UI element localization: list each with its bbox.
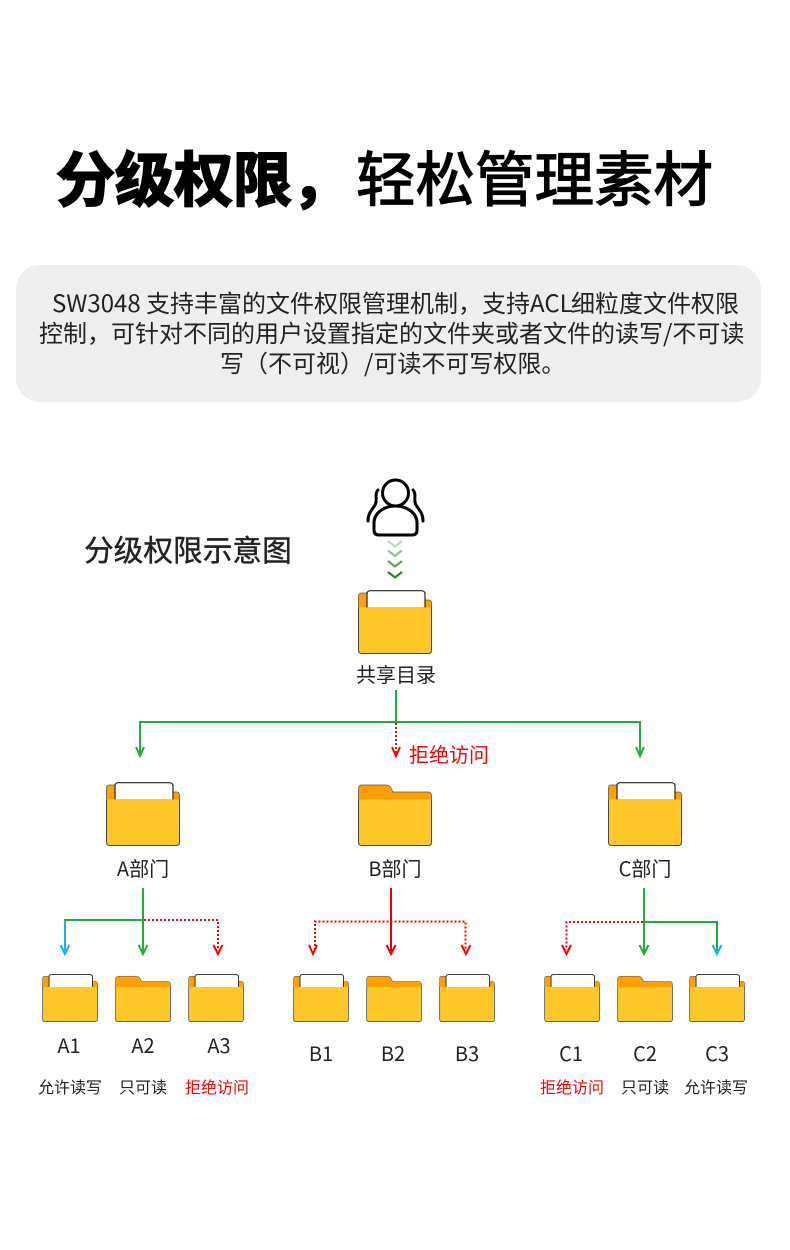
arrows: department B: [309, 888, 470, 954]
description text: 写（不可视）/可读不可写权限。: [220, 344, 565, 379]
arrows: department A: [60, 888, 222, 954]
labels: A sub-folders: A3: [207, 1030, 231, 1059]
label: shared directory: 共享目录: [356, 659, 436, 688]
labels: C sub-folders: [559, 1038, 729, 1067]
captions: C permissions: 允许读写: [684, 1074, 748, 1098]
captions: A permissions: 允许读写: [38, 1074, 102, 1098]
folder: department B: [358, 785, 432, 846]
captions: C permissions: [540, 1074, 748, 1098]
label: department C: C部门: [619, 853, 671, 882]
title: 分级权限，: [56, 133, 351, 218]
arrows: department C: [562, 888, 722, 954]
captions: A permissions: 只可读: [119, 1074, 167, 1098]
labels: B sub-folders: B2: [381, 1038, 405, 1067]
captions: A permissions: 拒绝访问: [185, 1074, 249, 1098]
description text: [39, 284, 744, 379]
title: [56, 133, 713, 219]
label: department B: B部门: [368, 853, 422, 882]
label: department A: A部门: [117, 853, 169, 882]
description text: 支持丰富的文件权限管理机制，支持ACL: [146, 284, 573, 319]
folders: C1 C2 C3: [545, 975, 744, 1022]
labels: C sub-folders: C2: [633, 1038, 657, 1067]
description text: 细粒度文件权限: [571, 284, 739, 319]
heading: diagram title: 分级权限示意图: [84, 527, 292, 570]
folder: department C: [608, 783, 682, 846]
captions: C permissions: 只可读: [621, 1074, 669, 1098]
icon: chevrons down: [388, 541, 402, 578]
title: 轻松管理素材: [356, 133, 713, 219]
folder: shared directory: [358, 591, 432, 654]
labels: B sub-folders: B1: [309, 1038, 333, 1067]
folders: A1 A2 A3: [43, 975, 243, 1022]
labels: C sub-folders: C3: [705, 1038, 729, 1067]
description text: SW3048: [52, 284, 141, 319]
captions: C permissions: 拒绝访问: [540, 1074, 604, 1098]
labels: A sub-folders: [57, 1030, 231, 1059]
description text: 控制，可针对不同的用户设置指定的文件夹或者文件的读写/不可读: [39, 314, 744, 349]
labels: A sub-folders: A2: [131, 1030, 155, 1059]
labels: B sub-folders: [309, 1038, 479, 1067]
label: access denied: 拒绝访问: [409, 739, 489, 768]
labels: C sub-folders: C1: [559, 1038, 583, 1067]
captions: A permissions: [38, 1074, 249, 1098]
labels: A sub-folders: A1: [57, 1030, 81, 1059]
icon: users: [368, 480, 423, 535]
folders: B1 B2 B3: [294, 975, 494, 1022]
folder: department A: [106, 783, 180, 846]
panel: description: [16, 265, 761, 402]
labels: B sub-folders: B3: [455, 1038, 479, 1067]
arrows: root to departments: [136, 690, 644, 756]
